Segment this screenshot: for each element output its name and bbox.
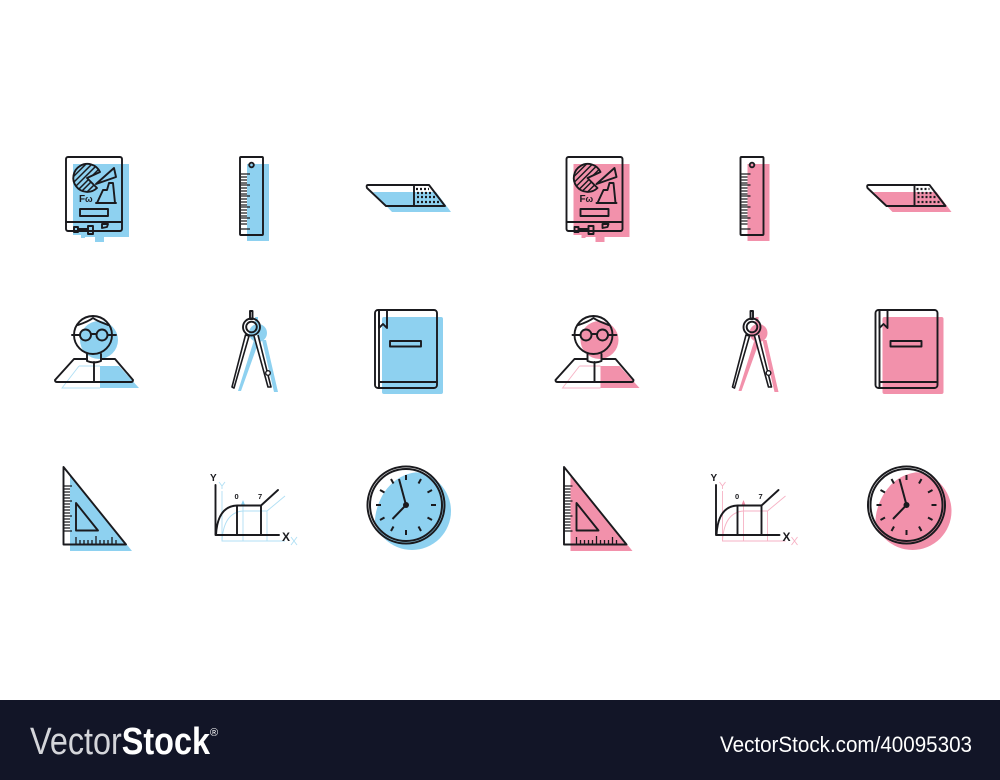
icon: ruler — [740, 157, 770, 241]
icon: math book with charts: ω — [85, 194, 93, 204]
panel: pink icon set — [556, 157, 952, 551]
icon: function graph — [210, 473, 297, 545]
icon: student with glasses — [556, 316, 640, 388]
icon: set square — [64, 467, 132, 551]
icon: eraser — [367, 185, 451, 212]
icon: function graph: Y — [210, 473, 217, 484]
icon: closed book — [375, 310, 443, 394]
icon: math book with charts: ω — [586, 194, 594, 204]
icon: drawing compass — [232, 311, 278, 392]
icon: function graph: 7 — [258, 492, 262, 501]
icon: math book with charts — [566, 157, 630, 242]
icon: math book with charts: F — [580, 194, 586, 205]
icon: closed book — [876, 310, 944, 394]
icon: wall clock — [868, 466, 952, 550]
icon: function graph: 0 — [735, 492, 739, 501]
icon: drawing compass — [732, 311, 778, 392]
icon: ruler — [240, 157, 269, 241]
icon: math book with charts: F — [79, 194, 85, 205]
panel: blue icon set — [55, 157, 451, 551]
footer registered mark: ® — [210, 727, 218, 739]
icon: function graph: 0 — [234, 492, 239, 501]
icon: function graph — [710, 473, 798, 545]
icon: student with glasses — [55, 316, 139, 388]
icon: math book with charts — [66, 157, 129, 242]
icon: function graph: X — [782, 530, 791, 544]
icon: eraser — [867, 185, 952, 212]
icon: function graph: X — [282, 530, 290, 544]
icon: function graph: Y — [710, 473, 718, 484]
footer image id: VectorStock.com/40095303 — [720, 732, 972, 757]
icon: wall clock — [368, 466, 451, 550]
footer banner — [0, 700, 1000, 780]
footer logo: VectorStock — [30, 721, 211, 763]
icon: set square — [564, 467, 632, 551]
icon: function graph: 7 — [758, 492, 763, 501]
